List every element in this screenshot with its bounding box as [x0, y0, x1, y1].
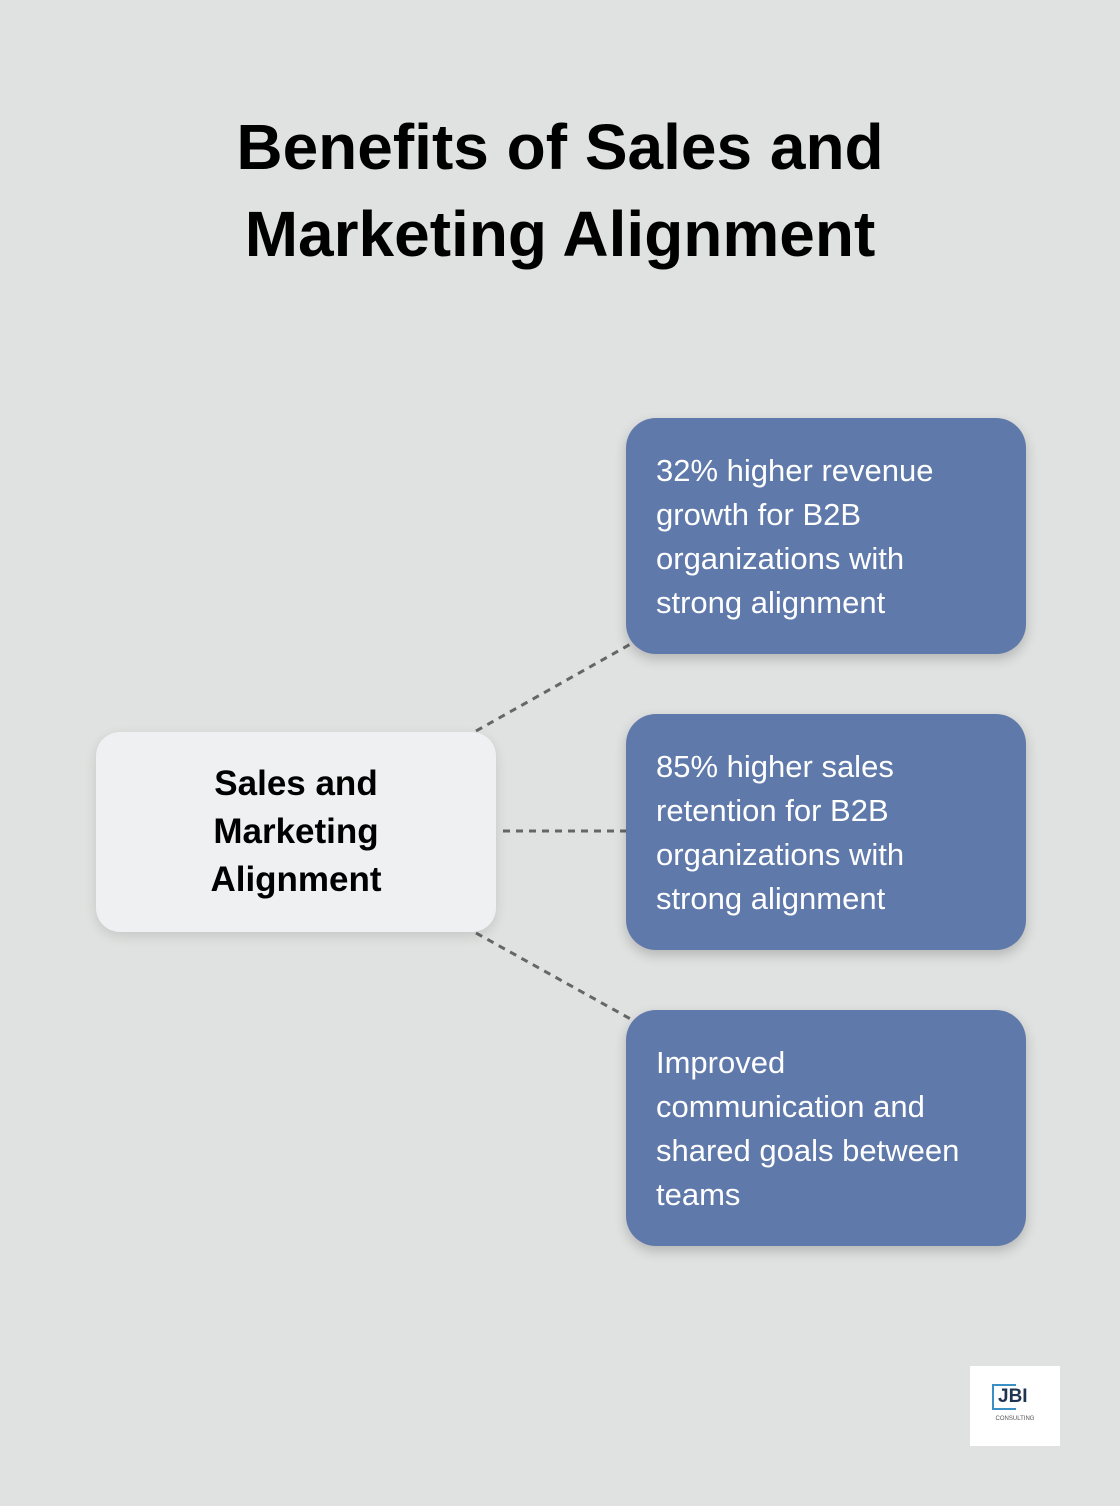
logo: JBI: [998, 1386, 1028, 1407]
box: retention: [626, 714, 1026, 950]
box: communication: shared goals between: [656, 1133, 959, 1168]
box: revenue: [626, 418, 1026, 654]
logo: [970, 1366, 1060, 1446]
box: retention: 85% higher sales: [656, 749, 894, 784]
box: communication: communication and: [656, 1089, 925, 1124]
logo: CONSULTING: [996, 1416, 1034, 1422]
box: revenue: organizations with: [656, 541, 904, 576]
box: revenue: growth for B2B: [656, 497, 861, 532]
center node: [96, 732, 496, 932]
title: Marketing Alignment: [245, 198, 875, 270]
center node: Marketing: [213, 812, 379, 851]
box: communication: [626, 1010, 1026, 1246]
box: retention: strong alignment: [656, 881, 885, 916]
box: revenue: 32% higher revenue: [656, 453, 933, 488]
box: revenue: strong alignment: [656, 585, 885, 620]
box: retention: organizations with: [656, 837, 904, 872]
center node: Alignment: [210, 860, 382, 899]
title: Benefits of Sales and: [236, 111, 884, 183]
box: communication: Improved: [656, 1045, 785, 1080]
box: communication: teams: [656, 1177, 740, 1212]
title: [236, 111, 884, 270]
box: retention: retention for B2B: [656, 793, 889, 828]
center node: Sales and: [214, 764, 378, 803]
